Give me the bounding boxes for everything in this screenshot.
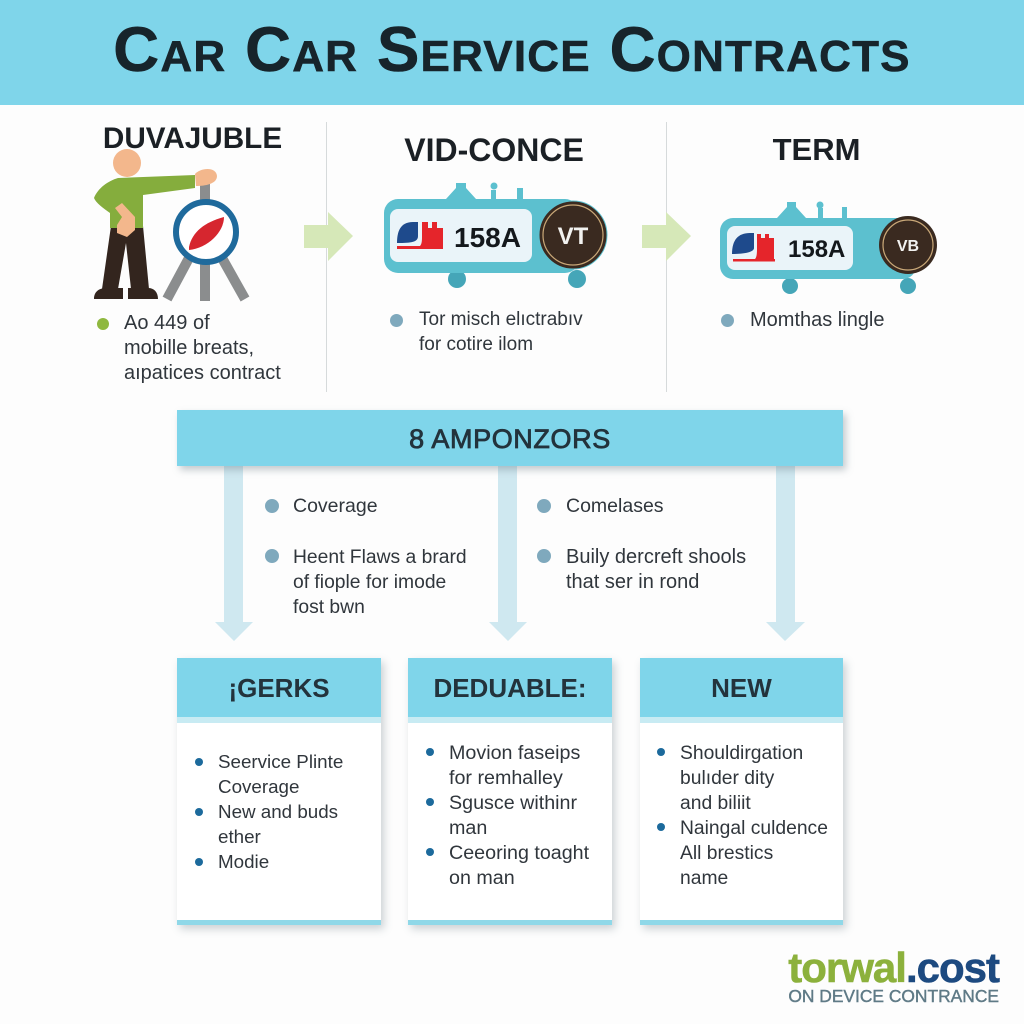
text xyxy=(566,546,746,593)
text block xyxy=(124,312,281,384)
logo wordmark: torwal.cost xyxy=(788,944,999,991)
logo xyxy=(788,944,1000,1006)
accent strip xyxy=(177,717,381,723)
bullet list: man xyxy=(449,817,487,839)
device label: 158A xyxy=(454,222,521,253)
accent strip xyxy=(640,717,843,723)
text block: for cotire ilom xyxy=(419,334,533,355)
bullet list: ether xyxy=(218,826,261,847)
text: of fiople for imode xyxy=(293,572,446,593)
bullet list: Seervice Plinte xyxy=(218,751,343,772)
bullet list: Shouldirgation xyxy=(680,743,803,764)
bottom strip xyxy=(640,920,843,925)
bullet list xyxy=(426,742,589,889)
bullet list: name xyxy=(680,868,728,889)
panel: middle list left xyxy=(265,495,467,618)
card header xyxy=(177,658,381,717)
bullet xyxy=(265,499,279,513)
text block: Momthas lingle xyxy=(750,309,885,331)
text: Comelases xyxy=(566,495,664,517)
device label: 158A xyxy=(788,236,845,263)
card: new xyxy=(640,658,843,925)
panel: column dividers xyxy=(326,122,667,392)
card header: NEW xyxy=(711,673,772,703)
card header: ¡GERKS xyxy=(228,673,330,703)
bullet xyxy=(97,318,109,330)
panel: vid-conce xyxy=(384,132,608,355)
bullet list: Naingal culdence xyxy=(680,818,828,839)
bullet xyxy=(390,314,403,327)
text: Buily dercreft shools xyxy=(566,546,746,568)
banner heading: 8 AMPONZORS xyxy=(409,424,611,454)
text: Heent Flaws a brard xyxy=(293,547,467,568)
heading: duvajuble: DUVAJUBLE xyxy=(103,122,282,155)
card: deduable xyxy=(408,658,612,925)
icon: device 158A VT xyxy=(384,182,608,288)
bullet list: Movion faseips xyxy=(449,742,580,764)
bullet xyxy=(537,549,551,563)
text block: mobille breats, xyxy=(124,337,254,359)
text: fost bwn xyxy=(293,597,365,618)
heading: term: TERM xyxy=(773,132,860,167)
bottom strip xyxy=(408,920,612,925)
bullet list: All brestics xyxy=(680,843,773,864)
bullet list: New and buds xyxy=(218,801,338,822)
bullet list: and biliit xyxy=(680,793,751,814)
logo tagline: ON DEVICE CONTRANCE xyxy=(788,986,999,1006)
card header xyxy=(408,658,612,717)
device badge: VB xyxy=(897,238,919,255)
bullet xyxy=(721,314,734,327)
bullet list: Sgusce withinr xyxy=(449,792,577,814)
arrow: green 2 xyxy=(642,212,691,261)
bullet list: Modie xyxy=(218,851,269,872)
arrow: green 1 xyxy=(304,212,353,261)
panel: middle list right xyxy=(537,495,746,593)
banner: 8 amponzors xyxy=(177,410,843,466)
icon: device 158A VB xyxy=(720,202,937,294)
bullet list xyxy=(195,751,343,872)
panel: term xyxy=(720,132,937,331)
bullet xyxy=(265,549,279,563)
text block: Ao 449 of xyxy=(124,312,210,334)
bullet list: bulıder dity xyxy=(680,768,774,789)
card header: DEDUABLE: xyxy=(433,673,587,703)
text xyxy=(293,547,467,618)
heading: vid-conce: VID-CONCE xyxy=(404,132,584,168)
bullet list: on man xyxy=(449,867,515,889)
panel: duvajuble xyxy=(94,122,282,384)
text block: Tor misch elıctrabıv xyxy=(419,309,583,330)
bullet list xyxy=(657,743,828,889)
icon: person with easel xyxy=(94,149,250,302)
down arrows xyxy=(215,466,805,641)
text: that ser in rond xyxy=(566,571,699,593)
title banner xyxy=(0,0,1024,105)
text block xyxy=(419,309,583,355)
title: Car Car Service Contracts xyxy=(113,15,911,85)
device badge: VT xyxy=(558,223,589,250)
bullet xyxy=(537,499,551,513)
bullet list: Coverage xyxy=(218,776,299,797)
text: Coverage xyxy=(293,495,378,517)
text block: aıpatices contract xyxy=(124,362,281,384)
bullet list: Ceeoring toaght xyxy=(449,842,589,864)
bullet list: for remhalley xyxy=(449,767,563,789)
accent strip xyxy=(408,717,612,723)
card: igerks xyxy=(177,658,381,925)
bottom strip xyxy=(177,920,381,925)
card header xyxy=(640,658,843,717)
